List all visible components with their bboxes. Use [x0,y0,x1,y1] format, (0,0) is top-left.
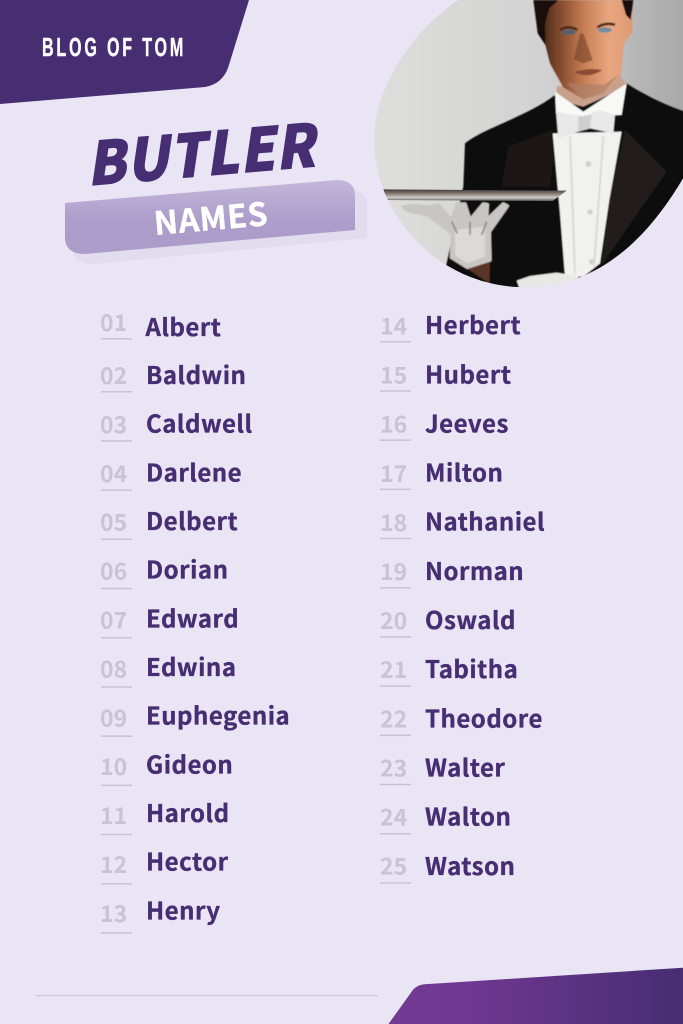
row 07: 07 [100,602,127,636]
row 14 [380,306,521,342]
row 18: Nathaniel [425,503,545,538]
left lapel [502,130,553,187]
row 17 [380,454,503,490]
row 03: 03 [100,406,127,440]
row 17: Milton [425,454,503,489]
tray [379,189,567,201]
row 22 [380,699,543,736]
row 07: Edward [146,599,239,634]
collar [555,83,627,117]
row 08 [100,648,237,688]
row 01: 01 [100,304,127,338]
row 15: 15 [380,357,407,391]
row 05: Delbert [146,502,238,537]
row 06: 06 [100,553,127,587]
cuff [467,262,490,283]
row 09 [100,697,290,737]
row 15: Hubert [425,355,511,390]
row 01 [100,304,221,343]
row 16: Jeeves [425,404,509,439]
footer banner [388,968,683,1024]
row 02: 02 [100,357,127,391]
face [538,0,633,99]
row 14: Herbert [425,306,521,341]
photo: butler holding tray [370,0,683,300]
row 24: 24 [380,798,407,832]
row 20 [380,601,516,638]
bow tie [556,110,615,138]
hair [533,0,633,45]
row 13 [100,891,221,934]
row 21 [380,650,518,687]
row 21: Tabitha [425,650,518,685]
row 20: Oswald [425,601,516,636]
row 24 [380,798,511,834]
row 10: Gideon [146,745,233,780]
subtitle ribbon: names [65,180,367,264]
header banner: blog of tom: BLOG OF TOM [42,32,186,62]
row 08: 08 [100,650,127,684]
footer rule [36,995,378,996]
row 09: Euphegenia [146,697,290,732]
row 06 [100,551,228,589]
row 25: Watson [425,847,515,882]
shirt front [553,132,622,277]
row 01: Albert [144,308,221,343]
title: butler: BUTLER [82,99,324,203]
row 06: Dorian [146,551,228,586]
row 10 [100,745,233,786]
row 03: Caldwell [146,405,253,440]
row 04 [100,453,242,491]
row 07 [100,599,239,638]
jacket [437,83,683,300]
row 24: Walton [425,798,511,833]
neck shadow [557,75,627,107]
header banner: blog of tom [0,0,249,104]
row 18 [380,503,545,539]
row 19: Norman [425,552,524,587]
row 14: 14 [380,308,407,342]
row 12 [100,843,229,884]
lower hand [516,272,580,288]
row 04: Darlene [146,453,242,488]
row 03 [100,405,253,442]
row 10: 10 [100,748,127,782]
row 25 [380,847,515,884]
row 23: 23 [380,749,407,783]
row 08: Edwina [146,648,237,683]
row 04: 04 [100,455,127,489]
row 12: Hector [146,843,229,878]
row 25: 25 [380,848,407,882]
list: names 01 to 13 [100,304,290,934]
row 12: 12 [100,846,127,880]
row 16: 16 [380,406,407,440]
row 19 [380,552,524,588]
row 16 [380,404,509,441]
subtitle ribbon: names: NAMES [152,189,270,245]
brows, eyes, nose and mouth [560,24,615,30]
list: names 14 to 25 [380,306,545,884]
row 19: 19 [380,553,407,587]
row 09: 09 [100,699,127,733]
row 22: 22 [380,700,407,734]
row 23: Walter [425,748,505,784]
row 17: 17 [380,455,407,489]
shirt buttons [585,161,591,167]
chin stubble [567,75,618,99]
row 13: 13 [100,895,127,929]
row 23 [380,748,505,785]
row 05: 05 [100,504,127,538]
row 11 [100,794,230,835]
row 02 [100,356,246,392]
row 02: Baldwin [146,356,246,391]
row 15 [380,355,511,392]
row 21: 21 [380,651,407,685]
row 22: Theodore [425,699,543,734]
row 18: 18 [380,504,407,538]
row 05 [100,502,238,540]
row 11: 11 [100,797,127,831]
right lapel [602,130,667,265]
glove [403,204,507,267]
glove highlights [455,227,485,263]
row 11: Harold [146,794,230,829]
row 20: 20 [380,602,407,636]
row 13: Henry [146,891,221,926]
